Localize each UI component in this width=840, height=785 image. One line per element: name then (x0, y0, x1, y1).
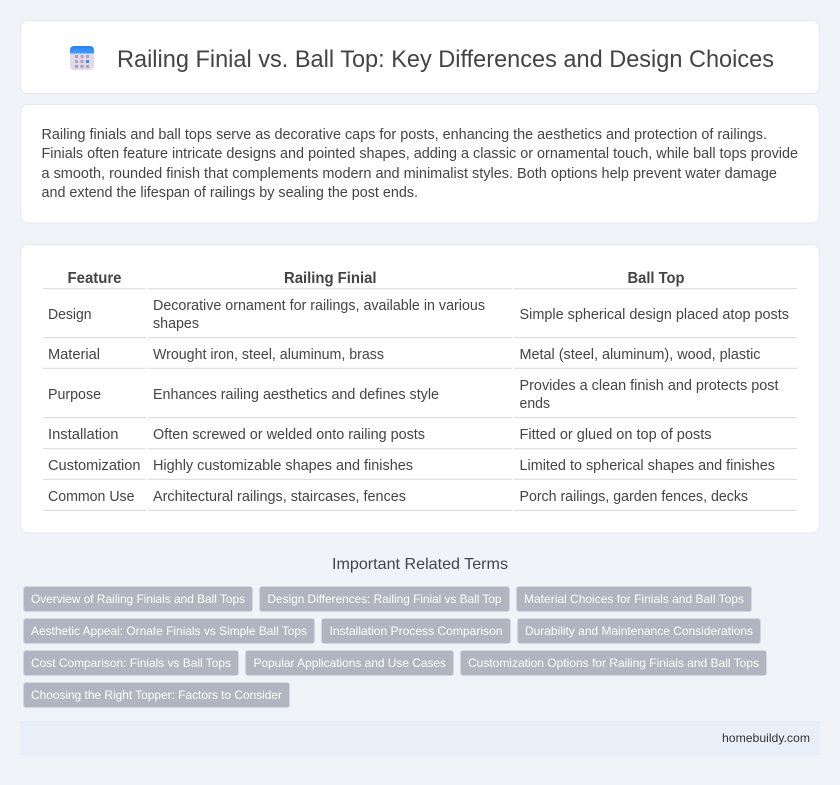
tag (24, 650, 238, 676)
row: Purpose (48, 378, 778, 412)
tag: Overview of Railing Finials and Ball Tops (31, 592, 245, 606)
intro paragraph: and extend the lifespan of railings by sealing the post ends. (42, 185, 418, 201)
tag (24, 586, 252, 612)
tag: Durability and Maintenance Considerations (525, 624, 753, 638)
row: Material: Material (48, 347, 100, 363)
tag (246, 650, 454, 676)
row: Material (48, 347, 760, 363)
row: Design (48, 298, 789, 332)
row: Material: Metal (steel, aluminum), wood, plastic (520, 347, 760, 363)
intro paragraph: a smooth, rounded finish that complements modern and minimalist styles. Both options help prevent water damage (42, 166, 777, 182)
tag (24, 618, 314, 644)
tag: Material Choices for Finials and Ball Tops (524, 592, 744, 606)
table header: Feature (68, 270, 122, 287)
footer source text: homebuildy.com (722, 731, 810, 745)
related term tags (24, 586, 766, 708)
tag (322, 618, 510, 644)
heading: related terms: Important Related Terms (332, 556, 508, 573)
footer (20, 721, 820, 755)
row: Customization: Highly customizable shapes and finishes (153, 458, 413, 474)
row: Design: Simple spherical design placed atop posts (520, 307, 789, 323)
tag: Design Differences: Railing Finial vs Ball Top (268, 592, 502, 606)
table header: Railing Finial (284, 270, 376, 287)
icon: calendar (70, 46, 94, 70)
tag (24, 682, 290, 708)
row: Installation (48, 427, 712, 443)
row: Installation: Often screwed or welded onto railing posts (153, 427, 425, 443)
row: Purpose: Purpose (48, 387, 101, 403)
panel: comparison table (20, 244, 820, 533)
row: Installation: Fitted or glued on top of posts (520, 427, 712, 443)
row: Design: Decorative ornament for railings, available in various (153, 298, 485, 314)
table header (68, 270, 684, 287)
tag: Installation Process Comparison (330, 624, 502, 638)
intro paragraph: Railing finials and ball tops serve as decorative caps for posts, enhancing the aesthetics and protection of railings. (42, 127, 767, 143)
row: Purpose: Enhances railing aesthetics and defines style (153, 387, 439, 403)
row: Purpose: Provides a clean finish and protects post (520, 378, 778, 394)
row: Customization (48, 458, 775, 474)
row: Common Use: Architectural railings, staircases, fences (153, 489, 406, 505)
row: Installation: Installation (48, 427, 118, 443)
tag: Aesthetic Appeal: Ornate Finials vs Simple Ball Tops (31, 624, 307, 638)
intro paragraph (42, 127, 798, 201)
row: Customization: Customization (48, 458, 140, 474)
row: Common Use: Porch railings, garden fences, decks (520, 489, 748, 505)
tag: Popular Applications and Use Cases (254, 656, 446, 670)
intro paragraph: Finials often feature intricate designs and pointed shapes, adding a classic or ornamental touch, while ball tops provide (42, 146, 798, 162)
header panel (20, 20, 820, 94)
row: Design: shapes (153, 316, 199, 332)
row: Common Use: Common Use (48, 489, 134, 505)
tag (516, 586, 752, 612)
tag (260, 586, 510, 612)
title: Railing Finial vs. Ball Top: Key Differences and Design Choices (117, 46, 774, 73)
tag: Choosing the Right Topper: Factors to Consider (31, 688, 282, 702)
row: Common Use (48, 489, 748, 505)
tag: Customization Options for Railing Finials and Ball Tops (468, 656, 759, 670)
row: Material: Wrought iron, steel, aluminum, brass (153, 347, 384, 363)
row: Purpose: ends (520, 396, 550, 412)
table header: Ball Top (628, 270, 684, 287)
row: Design: Design (48, 307, 92, 323)
row: Customization: Limited to spherical shapes and finishes (520, 458, 775, 474)
tag: Cost Comparison: Finials vs Ball Tops (31, 656, 231, 670)
tag (518, 618, 760, 644)
tag (460, 650, 766, 676)
panel: intro (20, 104, 820, 223)
